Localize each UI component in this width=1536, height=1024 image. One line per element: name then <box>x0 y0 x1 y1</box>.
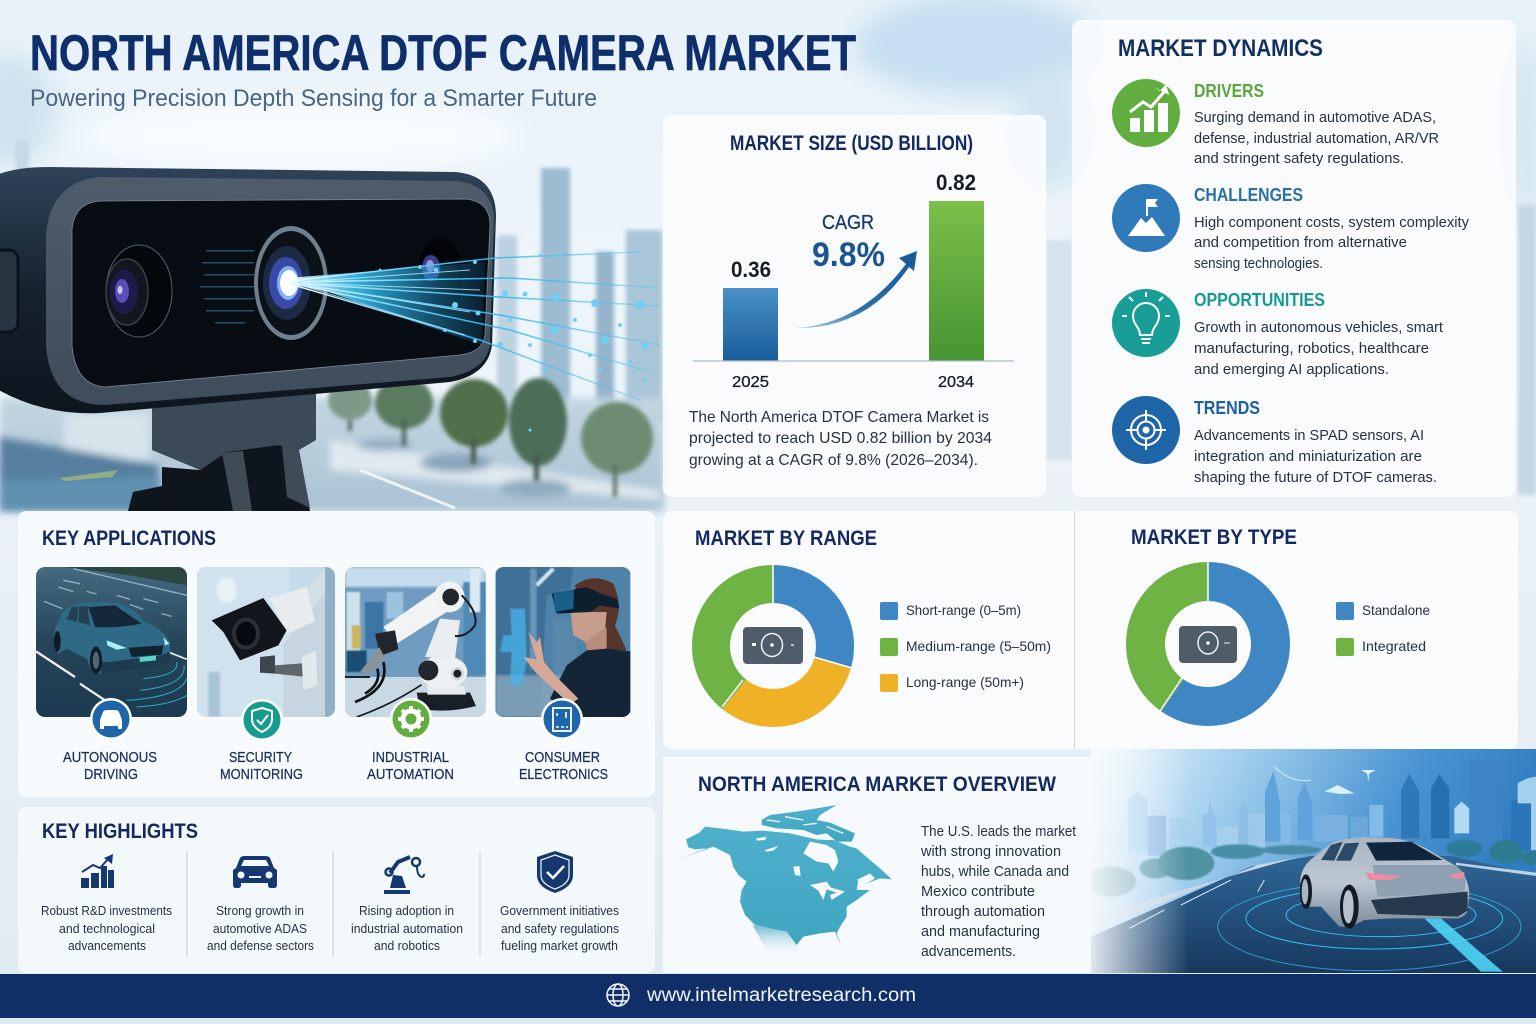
image: autonomous car <box>36 567 187 717</box>
highlight text: ADAS growth: automotive ADAS <box>213 922 307 936</box>
right lens <box>417 237 463 317</box>
label: consumer electronics: ELECTRONICS <box>519 766 608 783</box>
bar chart: 2034 <box>938 374 974 391</box>
bar chart: 2025 <box>732 374 769 391</box>
highlight text: R&D: advancements <box>68 939 146 953</box>
label: industrial automation: AUTOMATION <box>367 766 454 783</box>
bar chart: 0.82 <box>936 170 976 195</box>
icon: gear badge <box>390 698 432 740</box>
highlight text: ADAS growth <box>207 904 314 953</box>
side button <box>0 250 18 332</box>
donut chart: range <box>711 565 852 708</box>
highlight text: regulations: fueling market growth <box>501 939 618 953</box>
heading: key highlights: KEY HIGHLIGHTS <box>42 820 198 843</box>
highlight text: regulations <box>500 904 619 953</box>
drivers text: defense, industrial automation, AR/VR <box>1194 130 1439 147</box>
overview text: with strong innovation <box>920 844 1061 860</box>
icon: growth chart <box>81 854 114 888</box>
icon: globe <box>607 984 629 1006</box>
panel: key highlights <box>18 807 655 973</box>
heading: market by type: MARKET BY TYPE <box>1131 526 1297 549</box>
label: autonomous driving: DRIVING <box>84 766 138 783</box>
trends text <box>1194 398 1437 486</box>
opportunities text <box>1194 290 1444 378</box>
trends text: TRENDS <box>1194 398 1260 418</box>
bar chart <box>693 170 1014 391</box>
hero camera illustration <box>0 167 660 511</box>
label: autonomous driving <box>63 749 157 783</box>
opportunities text: OPPORTUNITIES <box>1194 290 1325 310</box>
icon: challenges <box>1112 184 1180 252</box>
drivers text: DRIVERS <box>1194 81 1264 101</box>
camera front panel <box>72 199 490 387</box>
challenges text: High component costs, system complexity <box>1194 214 1469 231</box>
bar chart: 0.36 <box>731 257 771 282</box>
highlight text: automation: Rising adoption in <box>359 904 454 918</box>
opportunities text: Growth in autonomous vehicles, smart <box>1194 319 1444 336</box>
panel: key applications <box>18 511 655 797</box>
light points <box>378 254 648 432</box>
market size text: projected to reach USD 0.82 billion by 2034 <box>689 430 992 447</box>
icon: drivers <box>1112 79 1180 147</box>
trends text: shaping the future of DTOF cameras. <box>1194 469 1437 486</box>
legend: range: Medium-range (5–50m) <box>906 638 1051 654</box>
heading: market size: MARKET SIZE (USD BILLION) <box>730 132 973 155</box>
highlight text: ADAS growth: Strong growth in <box>216 904 304 918</box>
label: industrial automation: INDUSTRIAL <box>372 749 449 766</box>
overview text: through automation <box>921 904 1045 920</box>
highlight text: R&D <box>41 904 172 953</box>
panel: market size <box>663 115 1046 497</box>
drivers text: and stringent safety regulations. <box>1194 150 1404 167</box>
challenges text: sensing technologies. <box>1194 255 1323 272</box>
market size text: growing at a CAGR of 9.8% (2026–2034). <box>689 452 978 469</box>
challenges text <box>1194 185 1469 272</box>
panel: market dynamics <box>1072 20 1516 497</box>
highlight text: ADAS growth: and defense sectors <box>207 939 314 953</box>
overview text: and manufacturing <box>921 924 1040 940</box>
legend: range <box>880 602 1051 692</box>
laser rays <box>280 252 660 400</box>
highlight text: regulations: Government initiatives <box>500 904 619 918</box>
image: security camera <box>197 567 335 717</box>
main lens <box>254 226 328 340</box>
image: robot arm <box>345 567 486 717</box>
icon: shield badge <box>241 699 283 741</box>
legend: range: Long-range (50m+) <box>906 674 1024 690</box>
map: north america <box>678 805 892 957</box>
legend: type: Integrated <box>1362 638 1426 654</box>
camera mount <box>128 388 316 511</box>
challenges text: CHALLENGES <box>1194 185 1303 205</box>
camera body <box>0 167 496 413</box>
panel: market by range and type <box>663 511 1518 749</box>
overview text: hubs, while Canada and <box>921 864 1069 880</box>
opportunities text: manufacturing, robotics, healthcare <box>1194 340 1429 357</box>
icon: device badge <box>541 698 583 740</box>
image: VR user <box>496 567 630 717</box>
icon: camera in donut <box>743 627 803 664</box>
donut chart: type <box>1146 562 1270 711</box>
market size text <box>689 409 992 469</box>
drivers text: Surging demand in automotive ADAS, <box>1194 109 1436 126</box>
highlight text: automation: and robotics <box>374 939 440 953</box>
icon: shield check <box>537 851 573 893</box>
label: industrial automation <box>367 749 454 783</box>
legend: range: Short-range (0–5m) <box>906 602 1021 618</box>
market size text: The North America DTOF Camera Market is <box>689 409 989 426</box>
heading: market dynamics: MARKET DYNAMICS <box>1118 35 1323 62</box>
footer bar <box>0 974 1536 1018</box>
heading: market by range: MARKET BY RANGE <box>695 527 877 550</box>
subtitle: Powering Precision Depth Sensing for a Smarter Future <box>30 85 597 112</box>
CAGR callout <box>812 212 885 274</box>
image: smart city and connected car <box>1086 749 1536 974</box>
icon: opportunities <box>1112 289 1180 357</box>
overview text: The U.S. leads the market <box>921 824 1076 840</box>
legend: type <box>1336 602 1430 656</box>
challenges text: and competition from alternative <box>1194 234 1407 251</box>
CAGR callout: 9.8% <box>812 236 885 274</box>
highlight text: automation: industrial automation <box>351 922 463 936</box>
CAGR callout: CAGR <box>822 212 874 234</box>
highlight text: automation <box>351 904 463 953</box>
opportunities text: and emerging AI applications. <box>1194 361 1389 378</box>
highlight text: R&D: and technological <box>59 922 155 936</box>
legend: type: Standalone <box>1362 602 1430 618</box>
icon: car <box>233 856 277 888</box>
trends text: integration and miniaturization are <box>1194 448 1422 465</box>
label: autonomous driving: AUTONONOUS <box>63 749 157 766</box>
overview text: Mexico contribute <box>921 884 1035 900</box>
highlight text: R&D: Robust R&D investments <box>41 904 172 918</box>
icon: camera in donut <box>1179 626 1237 663</box>
label: security monitoring: SECURITY <box>229 749 292 766</box>
icon: car badge <box>90 698 132 740</box>
arrow: growth <box>794 251 917 328</box>
dotted sensor grid <box>200 250 254 324</box>
drivers text <box>1194 81 1439 167</box>
label: security monitoring <box>220 749 303 783</box>
icon: trends <box>1112 396 1180 464</box>
label: consumer electronics: CONSUMER <box>525 749 600 766</box>
icon: robot arm <box>384 857 424 892</box>
website url: www.intelmarketresearch.com <box>646 985 916 1006</box>
left lens <box>106 245 172 337</box>
trends text: Advancements in SPAD sensors, AI <box>1194 427 1424 444</box>
panel: north america overview <box>663 757 1091 973</box>
label: security monitoring: MONITORING <box>220 766 303 783</box>
overview text: advancements. <box>921 944 1016 960</box>
heading: key applications: KEY APPLICATIONS <box>42 527 216 550</box>
highlight text: regulations: and safety regulations <box>501 922 619 936</box>
overview text <box>920 824 1076 960</box>
title: NORTH AMERICA DTOF CAMERA MARKET <box>30 25 856 81</box>
heading: market overview: NORTH AMERICA MARKET OVERVIEW <box>698 773 1056 796</box>
label: consumer electronics <box>519 749 608 783</box>
